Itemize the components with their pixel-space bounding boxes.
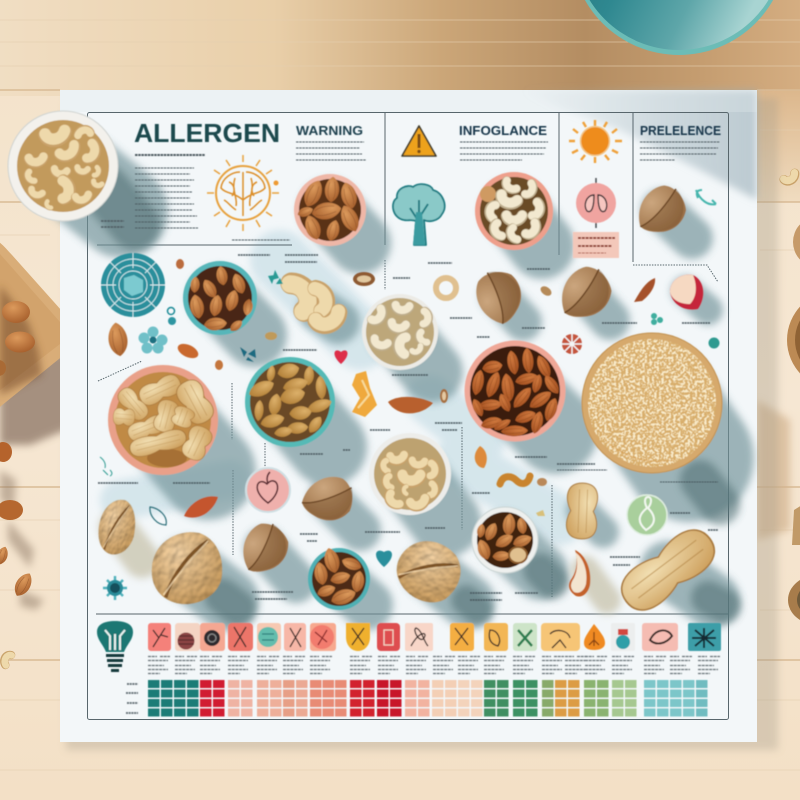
large peanut, upright: [566, 483, 598, 539]
sun caption: [575, 169, 616, 171]
row of food allergen icons: [148, 623, 721, 651]
almond, flower and small icons, left middle: [106, 259, 283, 370]
almond bowl, teal rim: [183, 261, 257, 335]
loose large cashews: [290, 279, 342, 328]
peanut bowl, teal rim: [245, 357, 335, 447]
flower and small motifs, right: [561, 313, 720, 355]
large peanut, lower right: [613, 521, 723, 619]
allergen prevalence heat grid: [148, 680, 708, 716]
small labels and heart: [98, 255, 718, 600]
pale blue washes on paper: [120, 260, 560, 520]
dark almond bowl, pink rim: [464, 340, 566, 442]
icon: warning triangle: [402, 126, 436, 156]
loose nuts on table: [0, 173, 797, 665]
sesame grain bowl: [582, 333, 722, 473]
cashew bowl, top left: [8, 111, 118, 221]
shadow cast across top of paper: [60, 90, 757, 200]
warning body text: [296, 142, 366, 160]
icon: teal radial wheel: [101, 253, 165, 317]
small nuts, right of centre: [475, 446, 547, 516]
peanut bowl, large pink rim: [108, 365, 218, 475]
large walnut, lower left: [149, 529, 225, 607]
lightbulb icon: [97, 621, 133, 672]
hazelnut, prevalence panel: [632, 181, 722, 240]
heading: prevalence: PRELELENCE: [640, 124, 721, 138]
subtitle and left body text: [101, 155, 290, 240]
walnut, left: [95, 497, 139, 557]
diagonal object shadows: [70, 170, 712, 605]
small almond and ring motif: [353, 272, 456, 298]
heading: infoglance: INFOGLANCE: [459, 124, 547, 138]
apple slice, lower right: [569, 550, 590, 597]
cashew bowl, pink rim: [475, 172, 553, 250]
infoglance body text: [460, 142, 548, 160]
cashew bowl, white, centre: [362, 294, 438, 370]
cutting board at left edge: [0, 238, 90, 445]
teal heart and starburst icons: [103, 551, 392, 600]
icon: pink circle with organ outline: [576, 178, 616, 228]
almond bowl, small white: [472, 507, 538, 573]
panel frame and dividers: [88, 112, 728, 720]
almond, centre: [388, 389, 448, 413]
almond bowl, small teal rim: [308, 546, 370, 610]
pink heart badge: [246, 468, 290, 512]
micro labels under icons: [148, 656, 720, 674]
pink label box: [573, 232, 619, 258]
cashew bowl, white, lower centre: [369, 433, 451, 515]
large wooden bowl at right edge: [757, 218, 800, 625]
title: ALLERGEN: [134, 120, 280, 148]
heading: warning: WARNING: [296, 124, 363, 138]
teal sprig motif: [100, 457, 112, 476]
icon: brain in sun: [207, 155, 279, 231]
row labels of heat grid: [126, 684, 138, 713]
infographic paper: [60, 90, 757, 742]
dotted connector lines: [98, 260, 718, 597]
teal bowl, top right: [571, 0, 787, 55]
hazelnut and leaf, centre left: [150, 470, 358, 526]
icon: orange sun: [569, 120, 622, 163]
hazelnuts and apple slice, upper right: [469, 261, 703, 327]
paper shadow: [66, 98, 778, 750]
darker cores of shadows: [105, 190, 724, 610]
almond bowl, pink rim: [294, 174, 366, 246]
pale warm shadows of walnut and apple: [117, 527, 607, 600]
prevalence body text: [640, 142, 720, 160]
hazelnut, lower left: [232, 516, 296, 579]
icon: teal tree: [393, 184, 445, 245]
warning icon caption: [398, 160, 440, 162]
green circle badge: [627, 495, 667, 535]
large walnut, lower centre: [385, 527, 473, 615]
